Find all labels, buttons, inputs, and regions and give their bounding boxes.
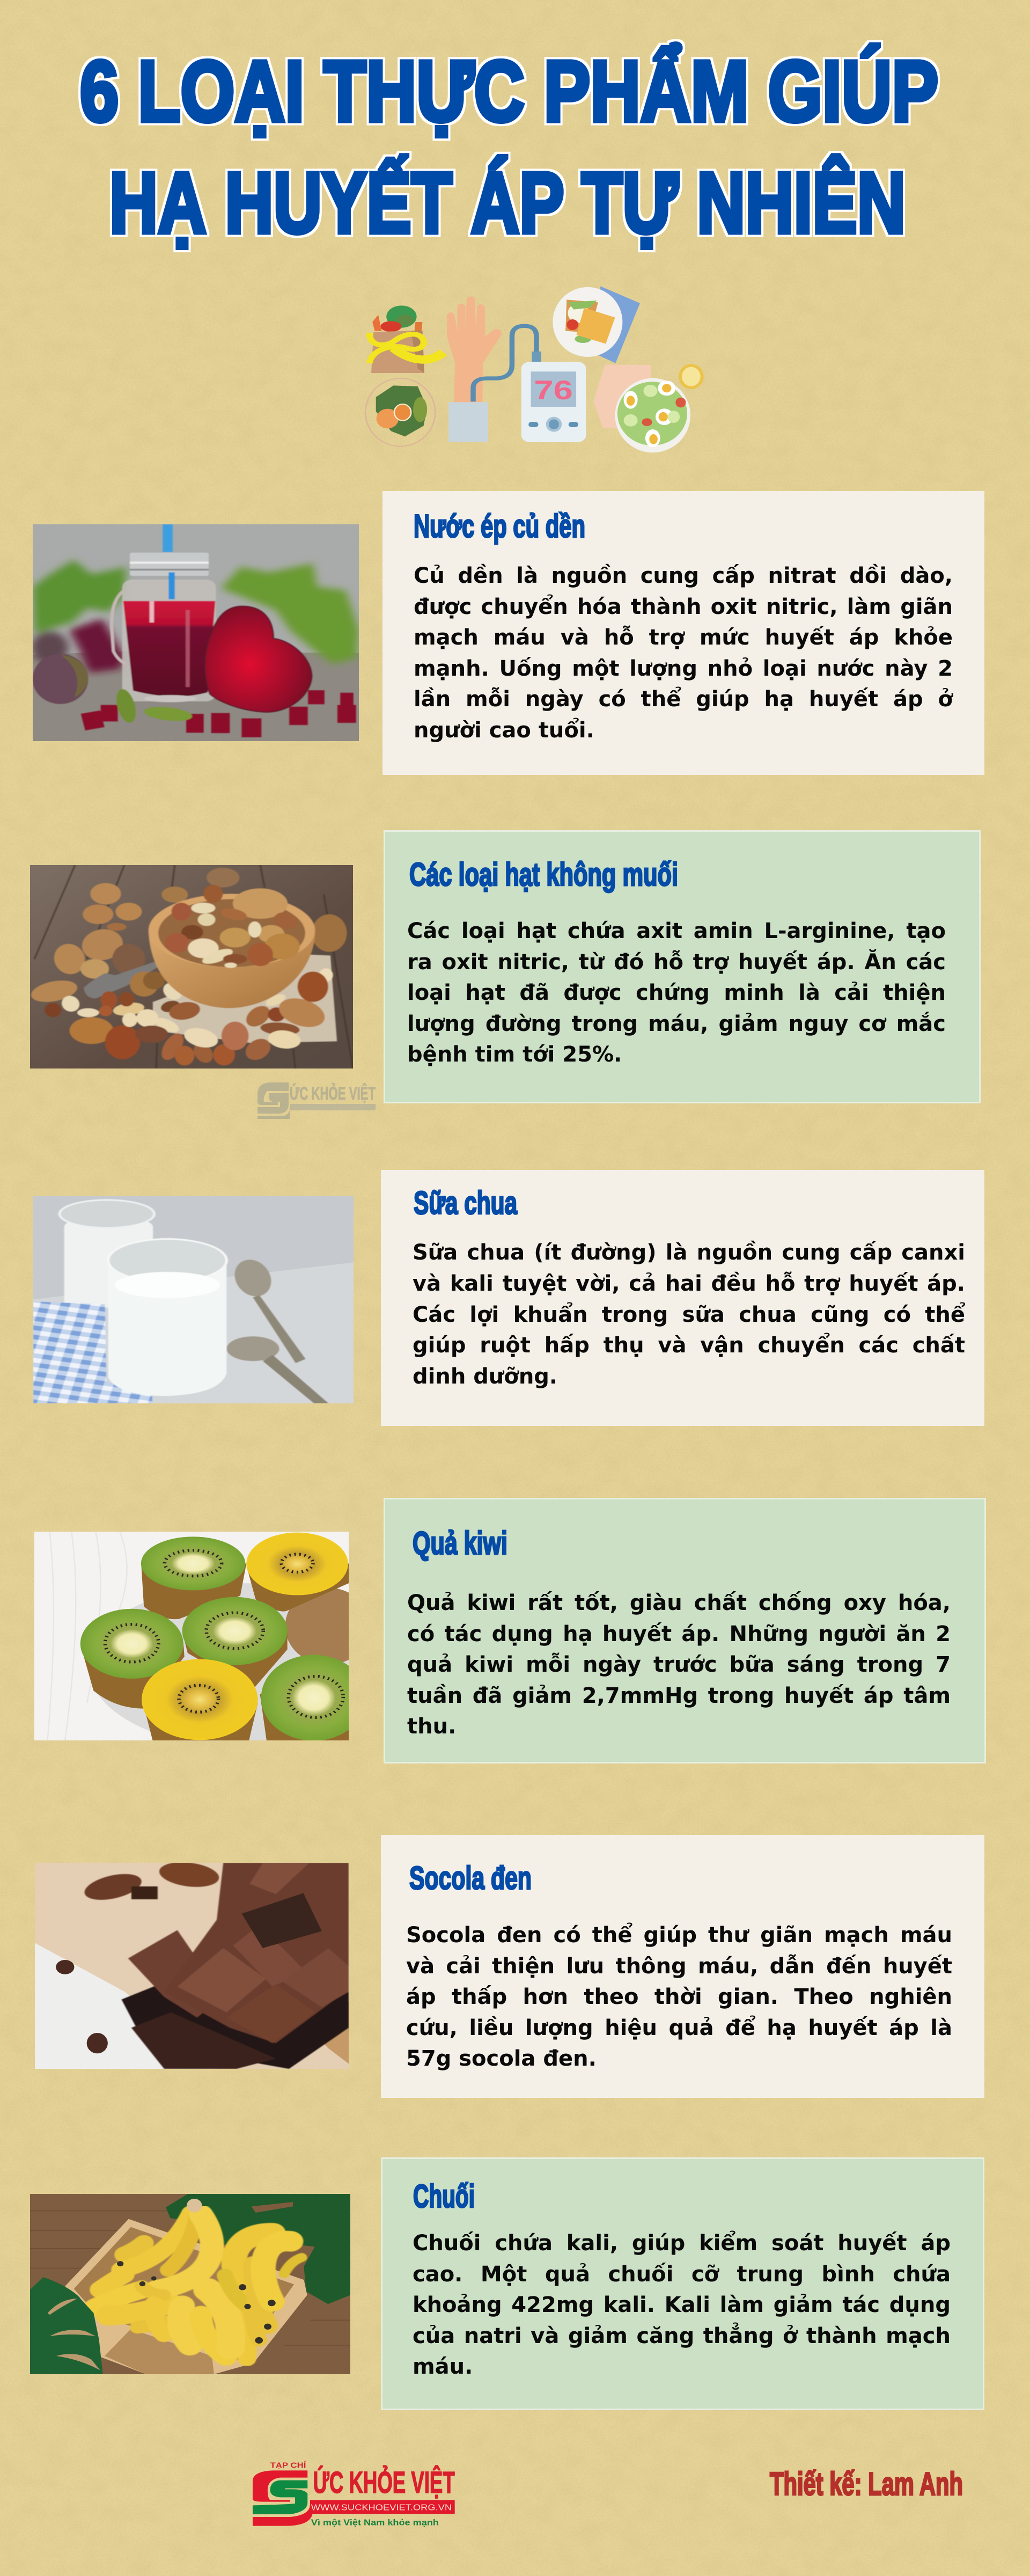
text block bbox=[414, 564, 953, 743]
logo: Sức Khỏe Việt magazine bbox=[245, 2458, 460, 2528]
heading: Sữa chua bbox=[414, 1185, 517, 1221]
heading: Chuối bbox=[413, 2178, 475, 2214]
text block: tuần đã giảm 2,7mmHg trong huyết áp tâm bbox=[407, 1684, 951, 1708]
heading: Socola đen bbox=[409, 1860, 532, 1896]
card: kiwi bbox=[384, 1498, 986, 1763]
panel: dark chocolate bbox=[35, 1835, 984, 2098]
panel: bananas bbox=[30, 2157, 984, 2410]
text block: Củ dền là nguồn cung cấp nitrat dồi dào, bbox=[414, 564, 953, 588]
card: beetroot juice bbox=[382, 491, 984, 775]
text block: dinh dưỡng. bbox=[413, 1364, 557, 1389]
text block bbox=[407, 916, 946, 1071]
icon: salad dish bbox=[593, 364, 704, 452]
text block: 57g socola đen. bbox=[406, 2046, 597, 2071]
text block: Chuối chứa kali, giúp kiểm soát huyết áp bbox=[413, 2231, 951, 2256]
text block: của natri và giảm căng thẳng ở thành mạch bbox=[413, 2324, 951, 2348]
text block: Socola đen có thể giúp thư giãn mạch máu bbox=[406, 1923, 952, 1948]
text block: loại hạt đã được chứng minh là cải thiện bbox=[407, 980, 946, 1005]
text block: cứu, liều lượng hiệu quả để hạ huyết áp là bbox=[406, 2016, 952, 2040]
photo: kiwi halves bbox=[34, 1532, 349, 1740]
text block: Sữa chua (ít đường) là nguồn cung cấp canxi bbox=[413, 1240, 965, 1265]
panel: kiwi bbox=[34, 1498, 986, 1763]
photo: yogurt jars bbox=[33, 1196, 354, 1403]
icon: grocery bag with measuring tape bbox=[370, 305, 443, 373]
panel: beetroot juice bbox=[33, 491, 984, 775]
photo: bowl of nuts bbox=[30, 865, 353, 1069]
icon: sandwich plate bbox=[553, 286, 640, 363]
icon: blood pressure monitor and healthy food illustration bbox=[365, 287, 704, 453]
photo: dark chocolate bars bbox=[35, 1863, 349, 2069]
text block: máu. bbox=[413, 2354, 473, 2379]
text: WWW.SUCKHOEVIET.ORG.VN bbox=[311, 2502, 452, 2512]
text block: và kali tuyệt vời, cả hai đều hỗ trợ huyết áp. bbox=[413, 1271, 965, 1296]
text block: lần mỗi ngày có thể giúp hạ huyết áp ở bbox=[414, 687, 953, 712]
text block: người cao tuổi. bbox=[414, 718, 594, 743]
heading: Các loại hạt không muối bbox=[409, 857, 678, 892]
text block: khoảng 422mg kali. Kali làm giảm tác dụng bbox=[413, 2293, 951, 2317]
card: dark chocolate bbox=[381, 1835, 984, 2098]
card: bananas bbox=[381, 2157, 984, 2410]
icon: salad plate bbox=[365, 378, 435, 447]
panel: yogurt bbox=[33, 1170, 984, 1426]
text block: mạnh. Uống một lượng nhỏ loại nước này 2 bbox=[414, 656, 953, 681]
icon: hand and cuff bbox=[447, 296, 502, 442]
text: ỨC KHỎE VIỆT bbox=[313, 2465, 455, 2499]
heading: Quả kiwi bbox=[413, 1525, 507, 1561]
text block bbox=[406, 1920, 952, 2075]
card: yogurt bbox=[381, 1170, 984, 1426]
card: unsalted nuts bbox=[384, 830, 981, 1103]
icon: blood pressure monitor: 76 bbox=[534, 375, 573, 405]
text block: Các lợi khuẩn trong sữa chua cũng có thể bbox=[413, 1302, 965, 1327]
kiwi skins bbox=[81, 1563, 349, 1740]
text block: cao. Một quả chuối cỡ trung bình chứa bbox=[413, 2262, 951, 2287]
text block: được chuyển hóa thành oxit nitric, làm giãn bbox=[414, 595, 953, 619]
text block: giúp ruột hấp thụ và vận chuyển các chất bbox=[413, 1333, 965, 1358]
text block: mạch máu và hỗ trợ mức huyết áp khỏe bbox=[414, 625, 953, 650]
logo: Sức Khỏe Việt magazine: TẠP CHÍ bbox=[270, 2461, 306, 2470]
text block: lượng đường trong máu, giảm nguy cơ mắc bbox=[407, 1012, 946, 1036]
text block: có tác dụng hạ huyết áp. Những người ăn 2 bbox=[407, 1622, 951, 1646]
watermark logo bbox=[256, 1080, 377, 1121]
text block bbox=[413, 2228, 951, 2383]
text block bbox=[407, 1588, 951, 1743]
text block: áp thấp hơn theo thời gian. Theo nghiên bbox=[406, 1985, 952, 2009]
heading: Nước ép củ dền bbox=[414, 508, 585, 544]
text block: và cải thiện lưu thông máu, dẫn đến huyết bbox=[406, 1954, 952, 1979]
photo: beetroot juice jar bbox=[33, 524, 359, 741]
photo: basket of bananas bbox=[30, 2194, 350, 2374]
text block: Quả kiwi rất tốt, giàu chất chống oxy hóa, bbox=[407, 1591, 951, 1615]
text block: quả kiwi mỗi ngày trước bữa sáng trong 7 bbox=[407, 1652, 951, 1677]
panel: unsalted nuts bbox=[30, 830, 981, 1103]
text block: Các loại hạt chứa axit amin L-arginine, tạo bbox=[407, 919, 946, 943]
icon: blood pressure monitor bbox=[521, 352, 586, 442]
text block: bệnh tim tới 25%. bbox=[407, 1042, 622, 1067]
text: Vì một Việt Nam khỏe mạnh bbox=[311, 2518, 439, 2527]
title bbox=[78, 39, 940, 252]
text block: ra oxit nitric, từ đó hỗ trợ huyết áp. Ăn các bbox=[407, 950, 946, 975]
text block: thu. bbox=[407, 1714, 456, 1739]
text block bbox=[413, 1238, 965, 1392]
icon: tube bbox=[473, 326, 536, 401]
